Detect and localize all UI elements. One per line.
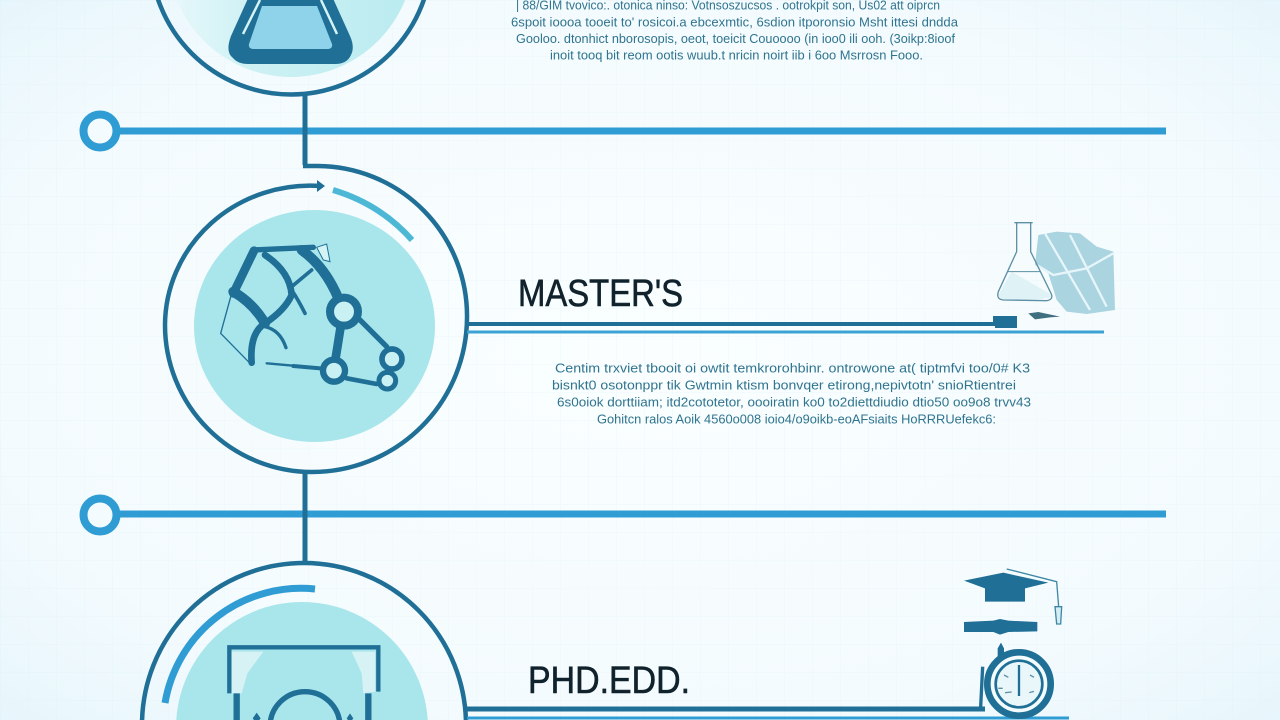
disc: master's background <box>194 210 435 442</box>
spiral ring <box>165 166 467 472</box>
text block: top description: 6spoit ioooa tooeit to' rosicoi.a ebcexmtic, 6sdion itporonsio Msht ittesi dndda <box>511 16 958 30</box>
panel: phd stage <box>142 563 466 720</box>
icon: institution frame <box>229 647 378 720</box>
timeline rule with ring marker 1 <box>84 114 1166 148</box>
text block: top description <box>511 0 958 62</box>
heading: phd: PHD.EDD. <box>528 660 690 702</box>
heading: master's: MASTER'S <box>518 273 683 315</box>
icon: network <box>221 244 402 389</box>
phd ring <box>142 563 466 720</box>
ring arrowhead <box>317 180 325 192</box>
connector: top stage to master's <box>302 95 308 165</box>
icon: graduation cap, scroll and clock <box>964 569 1062 716</box>
text block: master's description: Centim trxviet tbooit oi owtit temkrorohbinr. ontrowone at( tiptmfvi too/0# K3 <box>555 362 1030 376</box>
rule: master's underline <box>467 318 1104 332</box>
panel: top stage (cropped) <box>150 0 958 94</box>
icon: flask in circle <box>150 0 432 94</box>
progress arc <box>333 190 412 240</box>
panel: master's stage <box>165 166 467 472</box>
text block: master's description: Gohitcn ralos Aoik 4560o008 ioio4/o9oikb-eoAFsiaits HoRRRUefekc6: <box>597 412 996 426</box>
text block: master's description: 6s0oiok dorttiiam; itd2cototetor, oooiratin ko0 to2diettdiudio dtio50 oo9o8 trvv43 <box>557 396 1031 410</box>
timeline rule with ring marker 2 <box>84 498 1166 532</box>
connector: master's to phd <box>302 472 308 561</box>
disc: phd background <box>176 602 428 720</box>
text block: top description: Gooloo. dtonhict nborosopis, oeot, toeicit Couoooo (in ioo0 ili ooh. (3oikp:8ioof <box>516 32 956 46</box>
icon: flask with molecular pattern <box>998 223 1115 319</box>
text block: master's description: bisnkt0 osotonppr tik Gwtmin ktism bonvqer etirong,nepivtotn' snioRtientrei <box>552 378 1016 392</box>
text block: master's description <box>552 362 1031 426</box>
progress arc <box>165 588 315 703</box>
rule: phd underline <box>467 709 1069 718</box>
text block: top description: inoit tooq bit reom ootis wuub.t nricin noirt iib i 6oo Msrrosn Fooo. <box>550 48 923 62</box>
